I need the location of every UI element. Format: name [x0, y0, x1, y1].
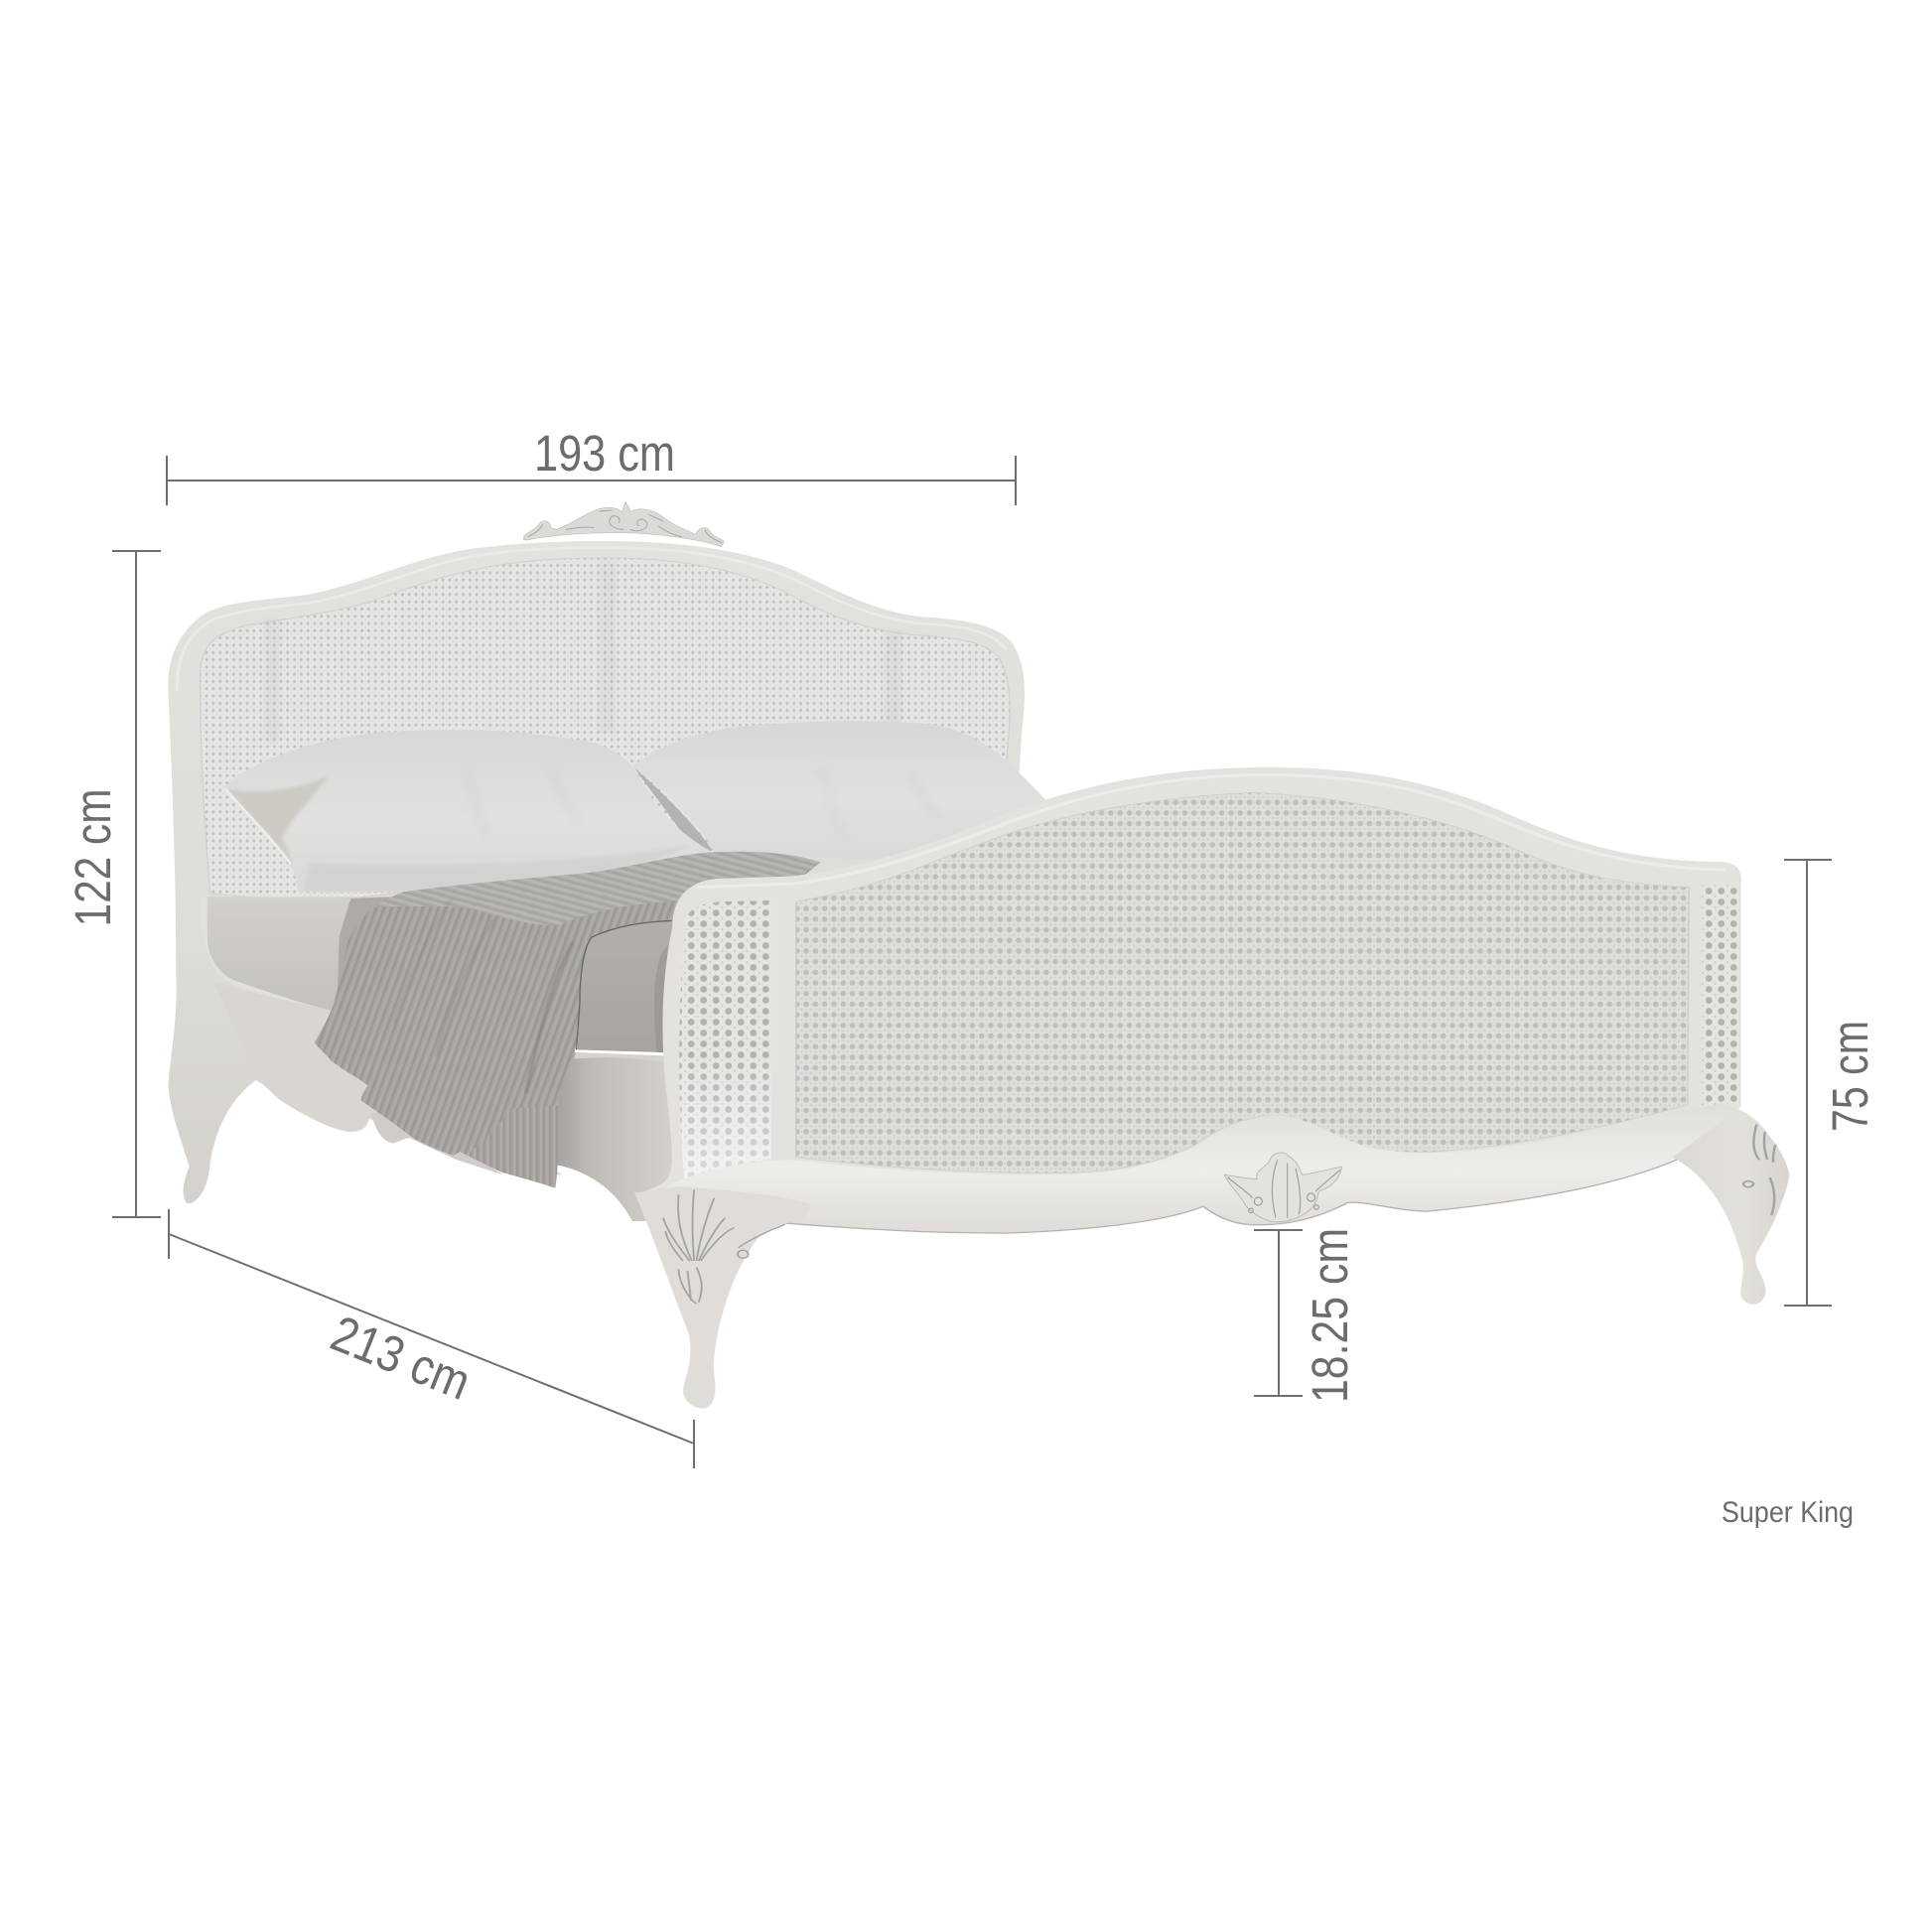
- dimension: width 193 cm: [167, 425, 1016, 505]
- rail bottom edge line: [783, 1160, 1677, 1233]
- label: 18.25 cm: [1302, 1228, 1358, 1403]
- blanket body: [315, 852, 821, 1188]
- footboard silhouette: [635, 767, 1741, 1233]
- right side cane panel: [1702, 884, 1738, 1107]
- centre cane panel: [796, 792, 1689, 1173]
- dimension line: [167, 456, 1016, 505]
- blanket upper fold: [374, 852, 821, 925]
- right sheet: [578, 903, 678, 1053]
- light sheet: [207, 897, 384, 1011]
- ornament details: [1228, 1160, 1340, 1218]
- bed illustration: [168, 502, 1790, 1409]
- headboard frame highlight: [177, 548, 1007, 691]
- headboard cane panel: [201, 558, 1010, 903]
- sheet fold: [654, 945, 668, 1052]
- side panel sheen: [679, 900, 771, 1182]
- right front leg: [1673, 1109, 1790, 1305]
- ornament leaves: [1224, 1153, 1342, 1222]
- blanket shadow folds: [394, 900, 573, 1092]
- right pillow seam: [634, 767, 713, 853]
- dimension: height 122 cm: [65, 551, 161, 1217]
- carved apron under throw: [370, 1109, 503, 1174]
- crest ornament: [523, 502, 724, 547]
- mattress and rails: [207, 897, 678, 1221]
- footboard-side rail: [556, 1051, 678, 1221]
- rail top highlight: [574, 1052, 672, 1064]
- left pillow seam: [225, 788, 290, 864]
- footboard top rim highlight: [697, 774, 1726, 888]
- throw blanket: [315, 852, 821, 1188]
- left side cane panel: [679, 900, 771, 1182]
- dimension line: [1784, 860, 1832, 1306]
- left pillow flap: [226, 776, 328, 863]
- label: 122 cm: [65, 788, 121, 927]
- label: 75 cm: [1822, 1021, 1878, 1132]
- footboard: [635, 767, 1790, 1305]
- headboard frame and back leg: [168, 541, 1025, 1203]
- left front leg: [634, 1186, 811, 1409]
- dimension: length 213 cm: [169, 1209, 694, 1468]
- size caption: Super King: [1722, 1496, 1854, 1529]
- centre rail ornament: [1224, 1153, 1342, 1222]
- side rail near headboard: [213, 982, 563, 1174]
- label: 213 cm: [324, 1305, 479, 1411]
- headboard: [168, 541, 1025, 1203]
- dimension: clearance 18.25 cm: [1254, 1228, 1358, 1403]
- bottom rail: [660, 1104, 1775, 1233]
- dimension: footboard height 75 cm: [1784, 860, 1878, 1306]
- label: 193 cm: [534, 425, 675, 482]
- sheet edge gap: [577, 920, 672, 1049]
- dark sheet strip: [338, 897, 394, 990]
- left pillow: [224, 730, 711, 893]
- leg shape: [634, 1186, 811, 1409]
- leg shell carving: [663, 1189, 785, 1304]
- dimension line: [169, 1209, 694, 1468]
- pillow shading: [304, 845, 689, 891]
- pillow creases: [466, 766, 941, 837]
- dimension line: [1254, 1230, 1303, 1396]
- headboard lower inner rim: [204, 898, 337, 1012]
- cane seams: [264, 561, 902, 742]
- right pillow: [633, 721, 1052, 863]
- pillows: [224, 721, 1052, 893]
- right leg carving: [1743, 1124, 1775, 1215]
- blanket hem: [467, 1105, 558, 1188]
- dimension line: [112, 551, 161, 1217]
